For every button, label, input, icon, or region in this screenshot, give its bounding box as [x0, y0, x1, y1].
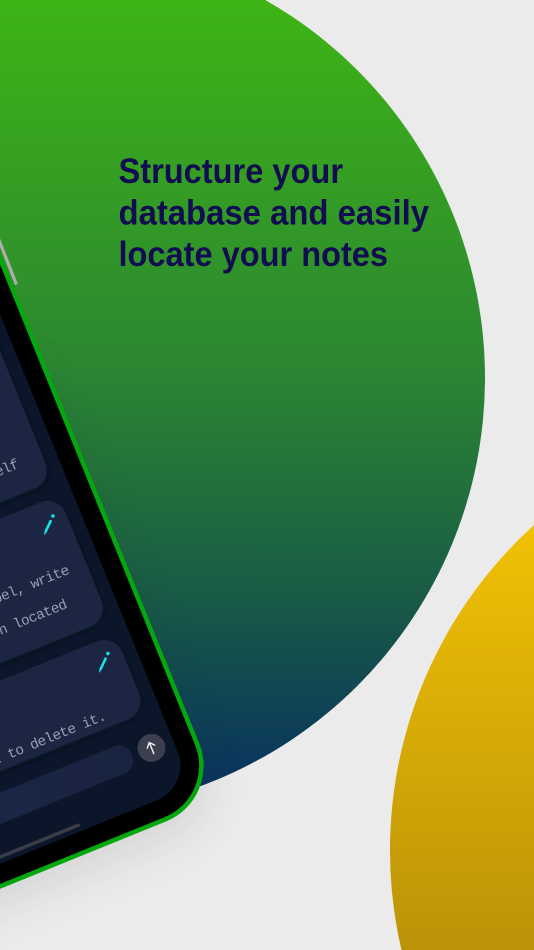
phone [0, 253, 204, 889]
icon: send button with up arrow [138, 734, 166, 762]
phone drop shadow [0, 336, 229, 945]
phone black bezel [0, 135, 216, 945]
icon: pencil on card 2 [44, 514, 55, 536]
icon: pencil on card 3 [99, 652, 110, 673]
title: locate your notes [118, 235, 388, 274]
note card 2 [0, 501, 104, 666]
phone green frame [0, 129, 222, 949]
input bar [0, 746, 133, 824]
green gradient circle [0, 0, 485, 813]
icon: silver side button [0, 236, 16, 284]
title: Structure your [118, 152, 343, 191]
note card 3 [0, 640, 142, 774]
phone screen [0, 314, 180, 864]
home indicator [0, 824, 80, 859]
yellow gradient circle [390, 525, 534, 950]
title [118, 152, 429, 274]
title: database and easily [118, 194, 429, 232]
